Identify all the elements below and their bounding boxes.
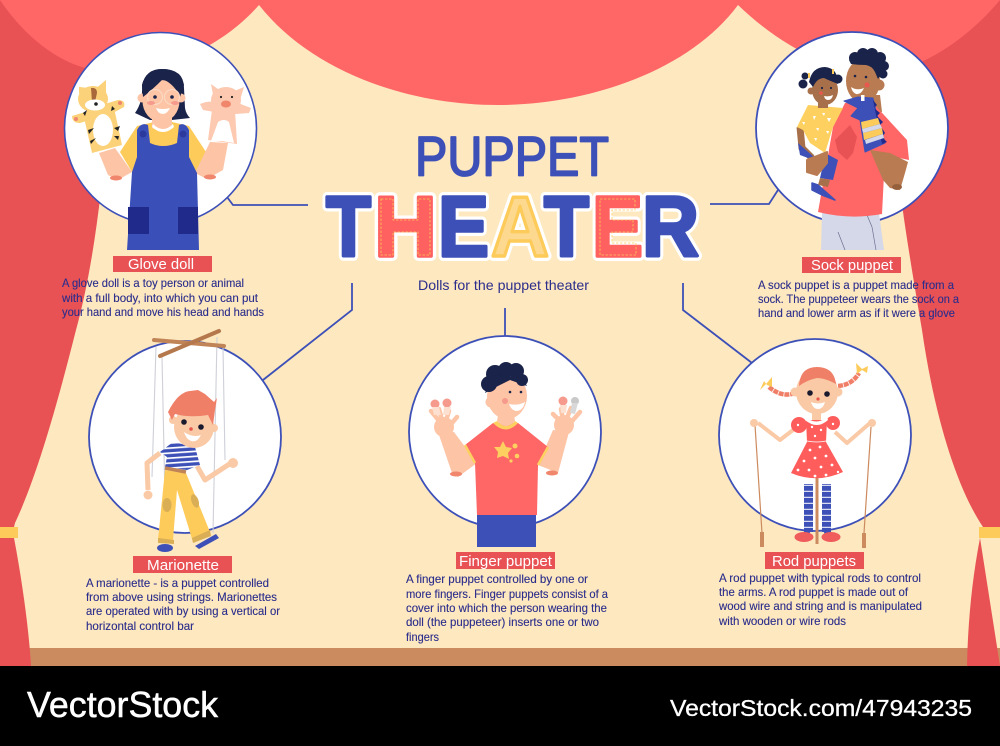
title: theater: A [491,180,549,275]
label: finger puppet: Finger puppet [459,553,553,570]
description: marionette: A marionette - is a puppet controlled [86,577,269,590]
label: glove doll [113,256,212,273]
description: sock puppet: hand and lower arm as if it were a glove [758,307,955,320]
figure: rod puppet girl [750,363,876,548]
description: rod puppets: with wooden or wire rods [718,615,846,628]
description: marionette: are operated with by using a vertical or [86,605,280,618]
title: theater: T [326,180,371,275]
description: sock puppet: sock. The puppeteer wears the sock on a [758,293,960,306]
description: glove doll [61,277,264,319]
label: sock puppet: Sock puppet [811,257,894,274]
label: glove doll: Glove doll [128,256,194,273]
title: theater: E [592,180,643,275]
description: rod puppets: wood wire and string and is manipulated [718,600,922,613]
right curtain [888,0,1000,666]
description: marionette: horizontal control bar [86,620,194,633]
title: puppet: PUPPET [415,124,609,188]
description: glove doll: with a full body, into which you can put [61,292,259,305]
sock puppet [844,95,887,152]
panel: sock puppet [756,32,960,320]
watermark bar [0,666,1000,746]
title: theater: R [642,180,699,275]
title: theater: E [438,180,489,275]
label: marionette: Marionette [147,557,219,574]
title: theater: E [438,180,489,275]
figure: father and child with sock puppet [797,48,909,250]
description: rod puppets: the arms. A rod puppet is made out of [719,586,909,599]
description: marionette: from above using strings. Marionettes [86,591,277,604]
puppet: pig [200,84,251,144]
description: finger puppet: fingers [406,631,439,644]
stage floor [0,648,1000,666]
finger puppets [430,396,579,415]
watermark bar: VectorStock.com/47943235 [670,695,972,721]
description: finger puppet: cover into which the person wearing the [406,602,607,615]
puppet: tiger [72,82,124,153]
title: theater: H [374,180,437,275]
connector lines [227,190,778,380]
figure: marionette boy [144,331,238,552]
description: finger puppet: more fingers. Finger puppets consist of a [406,588,609,601]
panel: marionette [86,331,281,633]
label: rod puppets: Rod puppets [772,553,856,570]
child [797,67,843,200]
description: rod puppets [718,572,922,628]
title: theater: R [642,180,699,275]
left curtain [0,0,112,666]
description: sock puppet: A sock puppet is a puppet made from a [758,279,955,292]
subtitle: Dolls for the puppet theater [418,277,589,293]
description: rod puppets: A rod puppet with typical rods to control [719,572,921,585]
title: theater: T [544,180,589,275]
figure: boy with finger puppets [430,362,580,547]
description: glove doll: your hand and move his head and hands [62,306,264,319]
panel: rod puppets [718,339,922,628]
description: marionette [86,577,280,633]
title: theater: A [491,180,549,275]
title: theater [326,180,699,275]
title: theater: T [544,180,589,275]
title: theater: E [592,180,643,275]
description: finger puppet: A finger puppet controlled by one or [406,573,588,586]
description: glove doll: A glove doll is a toy person or animal [62,277,244,290]
watermark bar: VectorStock [27,684,219,725]
label: marionette [133,556,232,574]
description: sock puppet [758,279,960,320]
top valance [0,0,1000,105]
description: finger puppet: doll (the puppeteer) inserts one or two [406,616,599,629]
title: theater: T [326,180,371,275]
title: theater: H [374,180,437,275]
panel: glove doll [61,32,264,319]
description: finger puppet [406,573,609,644]
figure: girl with glove puppets [72,69,251,250]
panel: finger puppet [406,336,609,644]
